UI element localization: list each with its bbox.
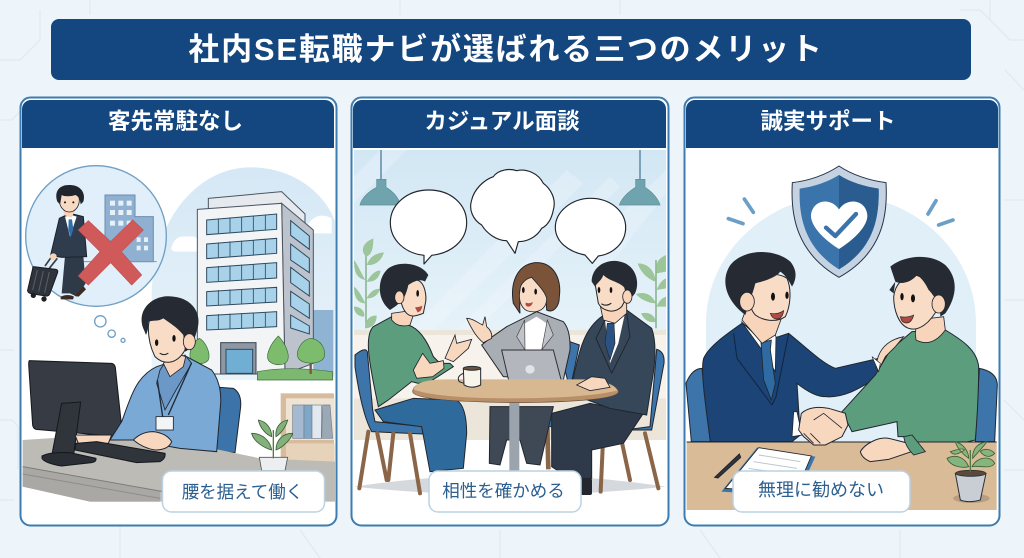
sweater cuff [904, 435, 925, 455]
label: 腰を据えて働く: 腰を据えて働く [182, 482, 303, 502]
label: 相性を確かめる [429, 471, 581, 512]
rays [728, 199, 953, 225]
icon: shield [792, 166, 886, 277]
woman [467, 263, 570, 465]
document and pen [715, 448, 815, 497]
heading: 客先常駐なし [22, 100, 334, 148]
speech bubbles [390, 170, 626, 264]
traveling consultant [51, 185, 87, 299]
panel: カジュアル面談 [352, 98, 668, 526]
customer hand on table [860, 438, 911, 462]
potted plant [947, 442, 995, 503]
chairs [355, 342, 664, 493]
office building [197, 192, 313, 374]
suitcase [28, 253, 58, 302]
coffee cup [458, 366, 481, 387]
customer in sweater [842, 257, 979, 455]
chair [217, 386, 242, 454]
heading: カジュアル面談: カジュアル面談 [424, 109, 580, 134]
panel: 客先常駐なし [20, 98, 336, 526]
label: 腰を据えて働く [162, 471, 324, 512]
office interior [281, 393, 335, 467]
heading: カジュアル面談 [353, 100, 666, 148]
office sky background [152, 167, 335, 380]
pendant lamps [360, 150, 660, 205]
heading: 誠実サポート: 誠実サポート [760, 109, 896, 134]
chairs [686, 368, 997, 442]
background semicircle [706, 195, 976, 443]
illustration: casual meeting [354, 150, 666, 495]
handshake [792, 407, 848, 445]
heading: 誠実サポート [686, 100, 998, 148]
table [687, 442, 997, 510]
desk [23, 433, 335, 502]
label: 無理に勧めない [733, 471, 910, 512]
man in suit [552, 261, 655, 495]
icon: red cross [78, 220, 143, 285]
illustration: office worker thinking [23, 166, 335, 502]
title: 社内SE転職ナビが選ばれる三つのメリット [188, 32, 824, 67]
laptop [501, 350, 562, 380]
plants [354, 238, 666, 328]
IT worker [75, 296, 221, 452]
title [51, 19, 971, 80]
round table [413, 379, 619, 472]
keyboard [75, 442, 165, 463]
trees [190, 336, 333, 380]
thought circle: client site crossed out [26, 166, 166, 306]
heading: 客先常駐なし: 客先常駐なし [108, 109, 243, 134]
plant [252, 420, 293, 471]
computer monitor [29, 361, 122, 466]
label: 相性を確かめる: 相性を確かめる [442, 481, 565, 501]
young man [368, 264, 472, 472]
thought bubbles [95, 316, 125, 342]
man's hand on table [577, 377, 610, 391]
advisor in suit [703, 252, 879, 442]
label: 無理に勧めない: 無理に勧めない [758, 480, 884, 500]
illustration: honest support handshake [686, 166, 997, 510]
panel: 誠実サポート [684, 98, 1000, 526]
window background [354, 150, 666, 495]
